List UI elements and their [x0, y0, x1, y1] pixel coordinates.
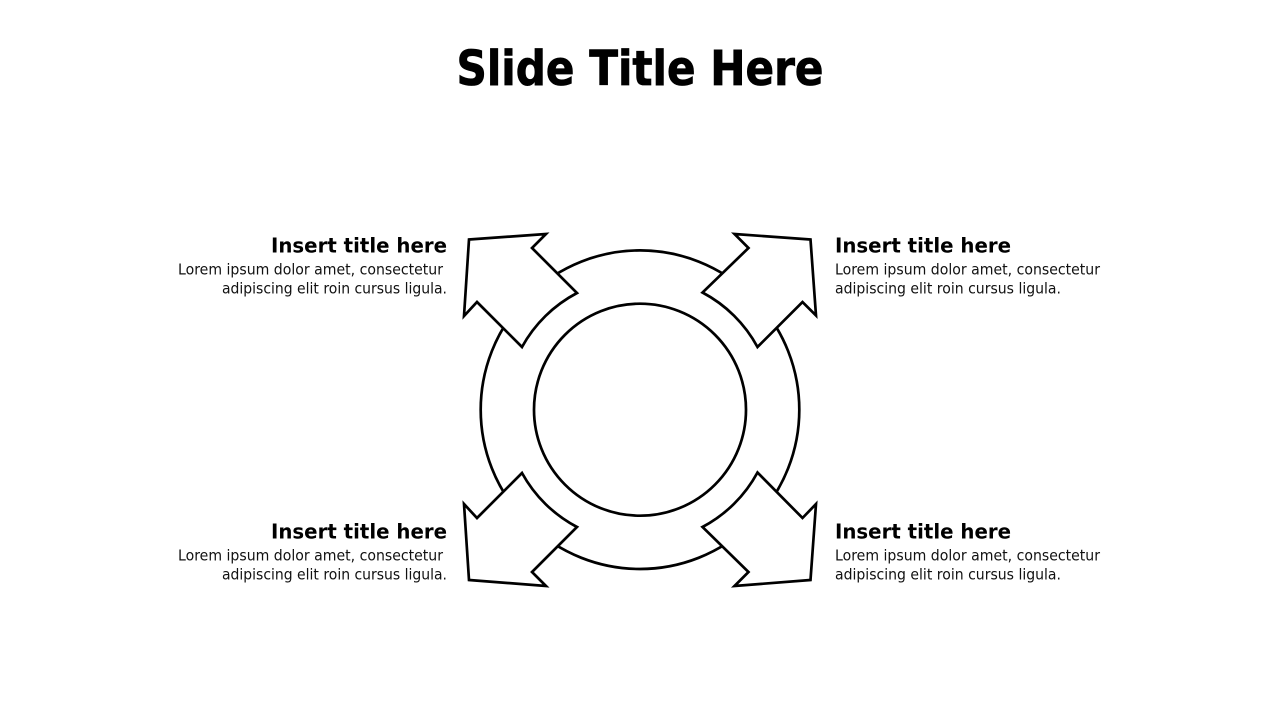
body: bottom right: Lorem ipsum dolor amet, consectetur — [835, 546, 1101, 564]
body: bottom left — [178, 546, 447, 584]
body: top left: adipiscing elit roin cursus ligula. — [222, 280, 447, 298]
body: bottom left: adipiscing elit roin cursus ligula. — [222, 566, 447, 584]
outer ring — [481, 250, 799, 569]
body: top right: Lorem ipsum dolor amet, consectetur — [835, 260, 1101, 278]
heading: top right: Insert title here — [835, 234, 1011, 258]
body: top left: Lorem ipsum dolor amet, consectetur — [178, 260, 444, 278]
arrow: bottom right — [702, 472, 816, 586]
body: bottom right: adipiscing elit roin cursus ligula. — [835, 566, 1061, 584]
arrow: bottom left — [464, 473, 577, 586]
text block: bottom left — [178, 520, 447, 584]
body: top right — [835, 260, 1101, 298]
arrow: top right — [702, 234, 816, 347]
heading: bottom right: Insert title here — [835, 520, 1011, 544]
body: top right: adipiscing elit roin cursus ligula. — [835, 280, 1061, 298]
body: bottom right — [835, 546, 1101, 584]
heading: top left: Insert title here — [271, 234, 447, 258]
arrow: top left — [464, 234, 577, 347]
inner circle — [534, 304, 746, 516]
diagram: ring with four arrows — [464, 234, 816, 586]
title: Slide Title Here — [456, 41, 824, 97]
body: top left — [178, 260, 447, 298]
text block: bottom right — [835, 520, 1101, 584]
heading: bottom left: Insert title here — [271, 520, 447, 544]
body: bottom left: Lorem ipsum dolor amet, consectetur — [178, 546, 444, 564]
text block: top right — [835, 234, 1101, 298]
text block: top left — [178, 234, 447, 298]
